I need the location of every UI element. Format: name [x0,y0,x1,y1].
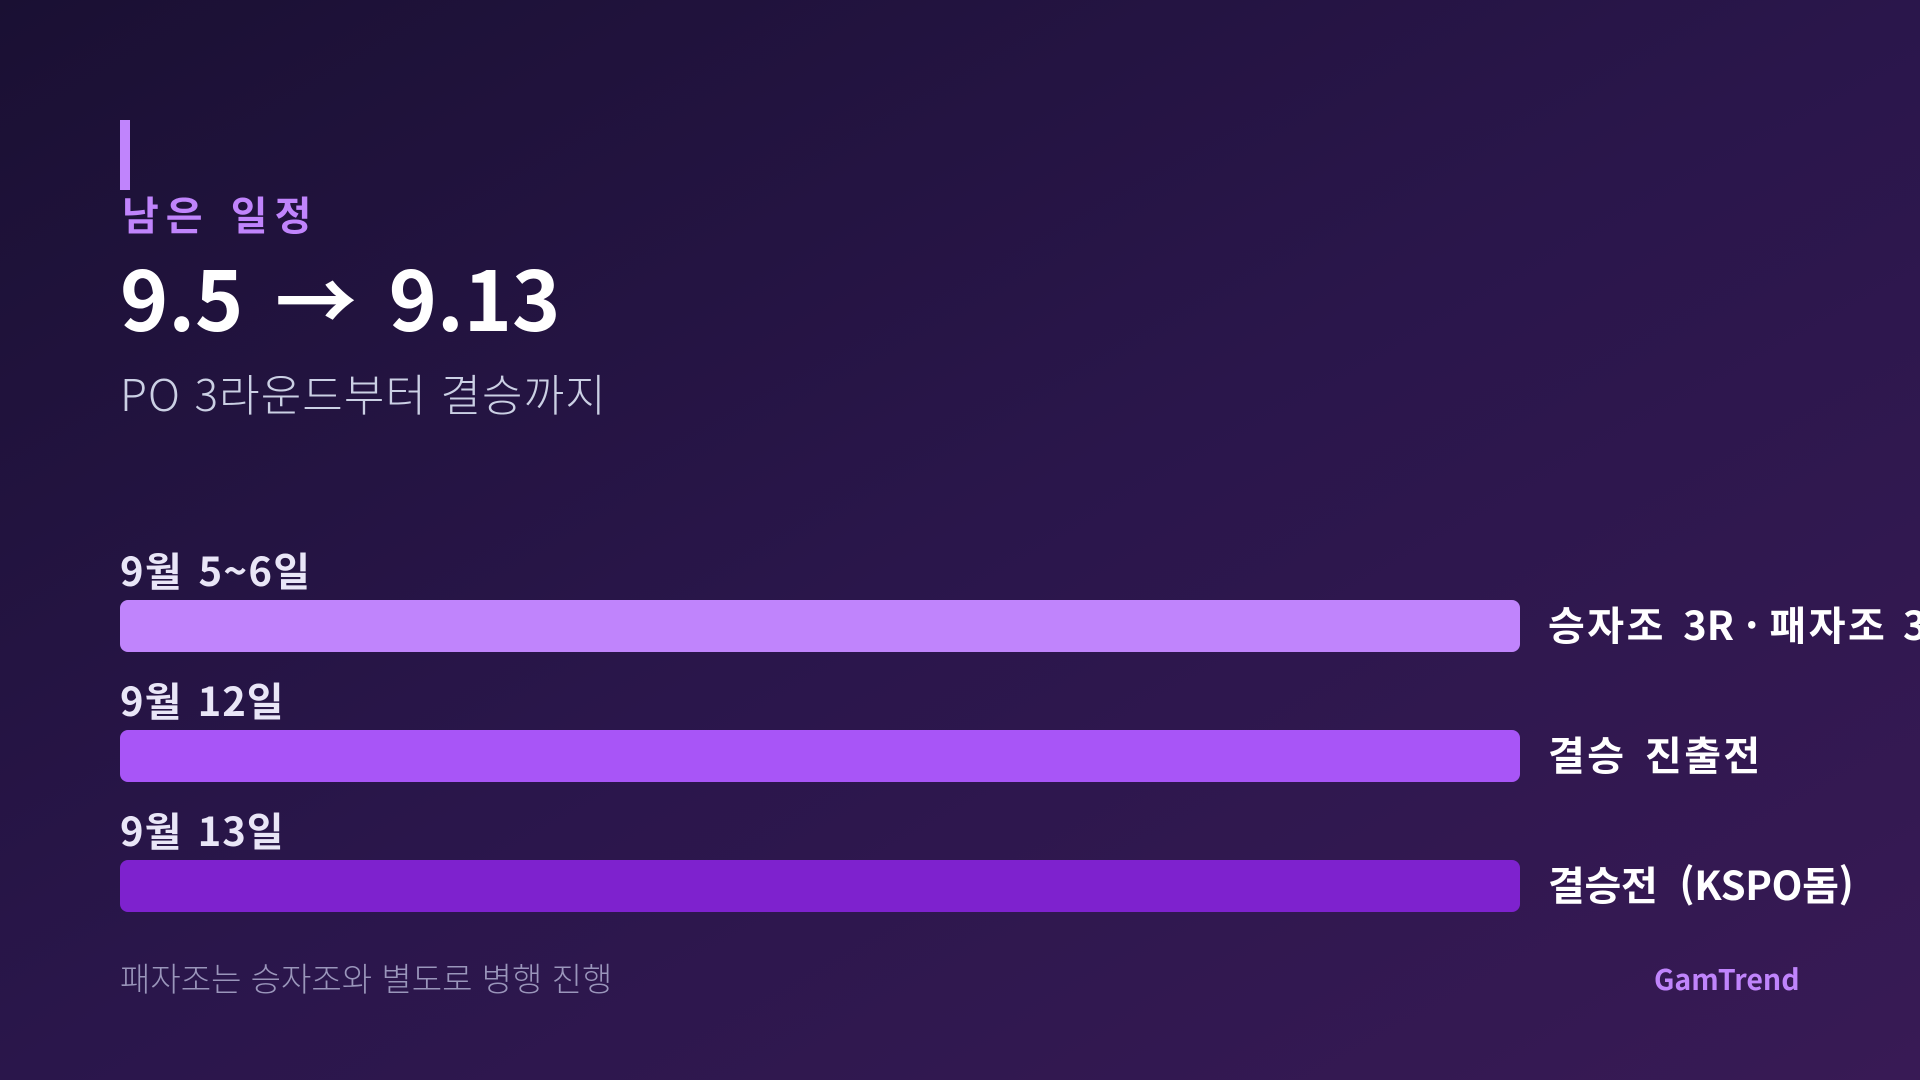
date label: 9월 5~6일 [120,540,311,598]
title: 9.5 → 9.13 [120,236,560,355]
schedule row: 9월 12일 [120,670,1763,782]
accent bar [120,120,130,190]
schedule row: 9월 13일 [120,800,1853,912]
eyebrow heading: 남은 일정 [122,184,318,242]
subtitle: PO 3라운드부터 결승까지 [120,360,607,424]
date label: 9월 12일 [120,670,285,728]
date label: 9월 13일 [120,800,285,858]
bar [120,600,1520,652]
schedule row: 9월 5~6일 [120,540,1920,652]
bar [120,730,1520,782]
brand logo: GamTrend [1654,958,1800,999]
bar [120,860,1520,912]
footnote: 패자조는 승자조와 별도로 병행 진행 [120,953,612,1001]
bar label: 결승전 (KSPO돔) [1548,854,1853,912]
bar label: 결승 진출전 [1548,724,1763,782]
